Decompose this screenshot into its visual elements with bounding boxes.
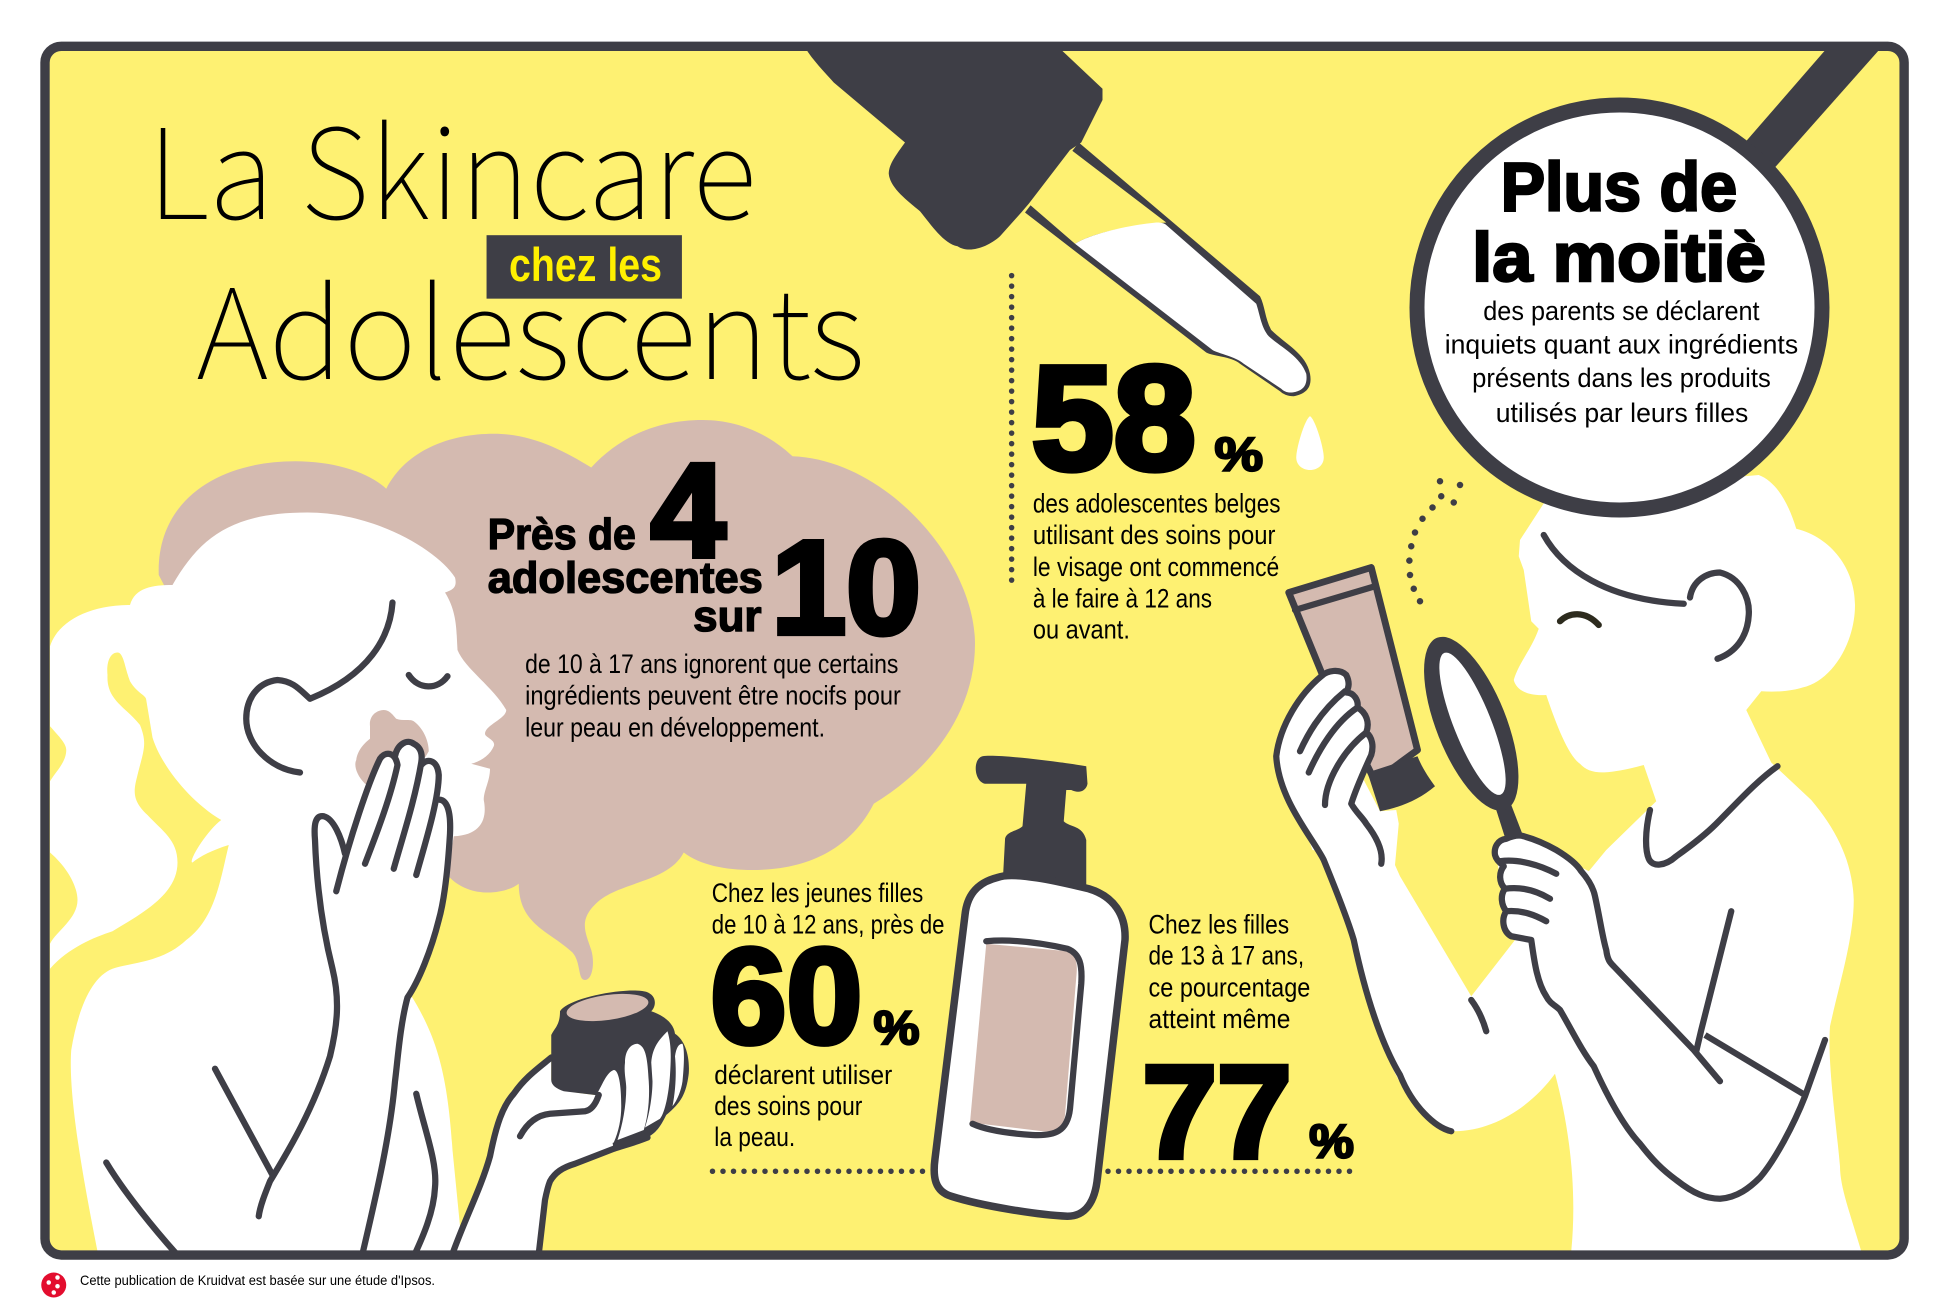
pump bottle <box>934 756 1125 1216</box>
callout text: des parents se déclarent <box>1483 296 1760 326</box>
hand outline <box>452 1058 648 1254</box>
sleeve lines <box>1696 911 1731 1051</box>
text: 58 percent description: le visage ont commencé <box>1033 552 1279 582</box>
hand holding the tube <box>1280 671 1384 864</box>
arm and fingers holding the magnifier <box>1495 836 1805 1199</box>
callout heading: la moitiè <box>1472 219 1766 296</box>
stat: 77 percent: 77 <box>1142 1038 1292 1185</box>
woman silhouette <box>1276 475 1861 1251</box>
headline stat: 4 sur 10: sur <box>693 593 762 641</box>
magnifier handle <box>1745 48 1881 169</box>
dropper glass outline <box>1025 142 1311 396</box>
text: girls 13 to 17: ce pourcentage <box>1149 973 1310 1003</box>
dropper bulb <box>805 48 1102 250</box>
callout text <box>1445 296 1798 428</box>
callout text: inquiets quant aux ingrédients <box>1445 329 1798 359</box>
callout heading <box>1472 148 1766 296</box>
text: use skincare: des soins pour <box>714 1091 862 1121</box>
magnifier lens <box>1417 105 1822 510</box>
title: Adolescents <box>196 234 865 415</box>
text: use skincare: déclarent utiliser <box>714 1060 892 1090</box>
text: 10 to 17 year olds: de 10 à 17 ans ignorent que certains <box>525 649 898 679</box>
callout heading: Plus de <box>1501 148 1737 225</box>
text: 58 percent description: des adolescentes belges <box>1033 489 1280 519</box>
callout text: présents dans les produits <box>1472 363 1771 393</box>
stat: 77 percent: % <box>1309 1115 1354 1168</box>
hair notches <box>50 726 78 944</box>
stat: 58 percent: % <box>1215 428 1263 481</box>
illustration: woman caring for her skin <box>50 512 689 1254</box>
dotted motion arc <box>1406 478 1463 604</box>
text: 58 percent description <box>1033 489 1280 644</box>
text: 58 percent description: ou avant. <box>1033 614 1130 644</box>
text: girls 13 to 17: de 13 à 17 ans, <box>1149 940 1304 970</box>
collar <box>1646 766 1778 865</box>
headline stat: 4 sur 10: 4 <box>651 436 725 585</box>
magnifier hand and arm outline <box>1495 836 1825 1199</box>
yellow gap in the hair <box>50 652 229 1251</box>
text: girls 13 to 17 <box>1149 909 1310 1034</box>
smiling closed eye <box>1560 614 1599 625</box>
title <box>148 74 865 415</box>
title: La Skincare <box>148 74 756 255</box>
text: 10 to 17 year olds: ingrédients peuvent être nocifs pour <box>525 680 901 710</box>
text: 58 percent description: utilisant des soins pour <box>1033 520 1276 550</box>
headline stat: 4 sur 10: 10 <box>772 513 921 662</box>
text: use skincare: la peau. <box>714 1122 795 1152</box>
elbow crease <box>1471 1000 1486 1031</box>
small magnifying glass <box>1405 625 1538 838</box>
callout text: utilisés par leurs filles <box>1496 398 1748 428</box>
text: girls 13 to 17: Chez les filles <box>1149 909 1289 939</box>
bottle label outline <box>972 941 1082 1135</box>
hair and ear line <box>246 602 392 772</box>
source note: Cette publication de Kruidvat est basée sur une étude d'Ipsos. <box>80 1273 435 1288</box>
text: 58 percent description: à le faire à 12 ans <box>1033 583 1212 613</box>
stat: 58 percent: 58 <box>1032 336 1196 501</box>
big magnifying glass callout <box>1417 48 1881 510</box>
hand and arm lines <box>259 742 450 1254</box>
cheek blemish <box>355 710 429 800</box>
headline stat: 4 sur 10: Près de <box>488 511 636 559</box>
closed eye <box>409 675 448 686</box>
headline stat: 4 sur 10 <box>488 436 921 662</box>
text: young girls 10 to 12: de 10 à 12 ans, près de <box>712 909 944 939</box>
text: young girls 10 to 12 <box>712 878 944 939</box>
hair and ear lines <box>1544 535 1749 659</box>
white liquid in the dropper <box>1075 222 1307 393</box>
stat: 60 percent: 60 <box>711 920 862 1072</box>
pump <box>976 756 1088 886</box>
text: girls 13 to 17: atteint même <box>1149 1004 1290 1034</box>
vertical dotted line <box>1009 276 1014 585</box>
bottle label <box>970 944 1077 1131</box>
text: 10 to 17 year olds: leur peau en développement. <box>525 713 825 743</box>
woman silhouette <box>50 512 506 1251</box>
shoulder lines <box>106 1069 435 1254</box>
cream tube <box>1289 568 1435 811</box>
text: use skincare <box>714 1060 892 1152</box>
text: 10 to 17 year olds <box>525 649 901 743</box>
text: young girls 10 to 12: Chez les jeunes filles <box>712 878 923 908</box>
stat: 77 percent <box>1142 1038 1354 1185</box>
hand and forearm lines <box>1276 671 1451 1131</box>
stat: 60 percent: % <box>874 1002 920 1055</box>
white drop <box>1296 416 1324 470</box>
horizontal dotted lines <box>712 1169 1352 1173</box>
beige thought cloud <box>159 420 975 980</box>
illustration: woman inspecting a product <box>1276 475 1861 1251</box>
thumb line <box>520 1095 599 1136</box>
hand holding the jar <box>451 1058 689 1251</box>
bottle body <box>934 876 1125 1216</box>
headline stat: 4 sur 10: adolescentes <box>488 554 763 602</box>
icon: Kruidvat logo <box>41 1272 66 1298</box>
dropper <box>805 48 1324 470</box>
hand on the face <box>250 744 450 1251</box>
empty part of the dropper <box>1029 150 1166 244</box>
cream jar <box>551 989 689 1150</box>
fingers around the jar <box>562 1031 684 1162</box>
title badge: chez les: chez les <box>509 239 662 292</box>
